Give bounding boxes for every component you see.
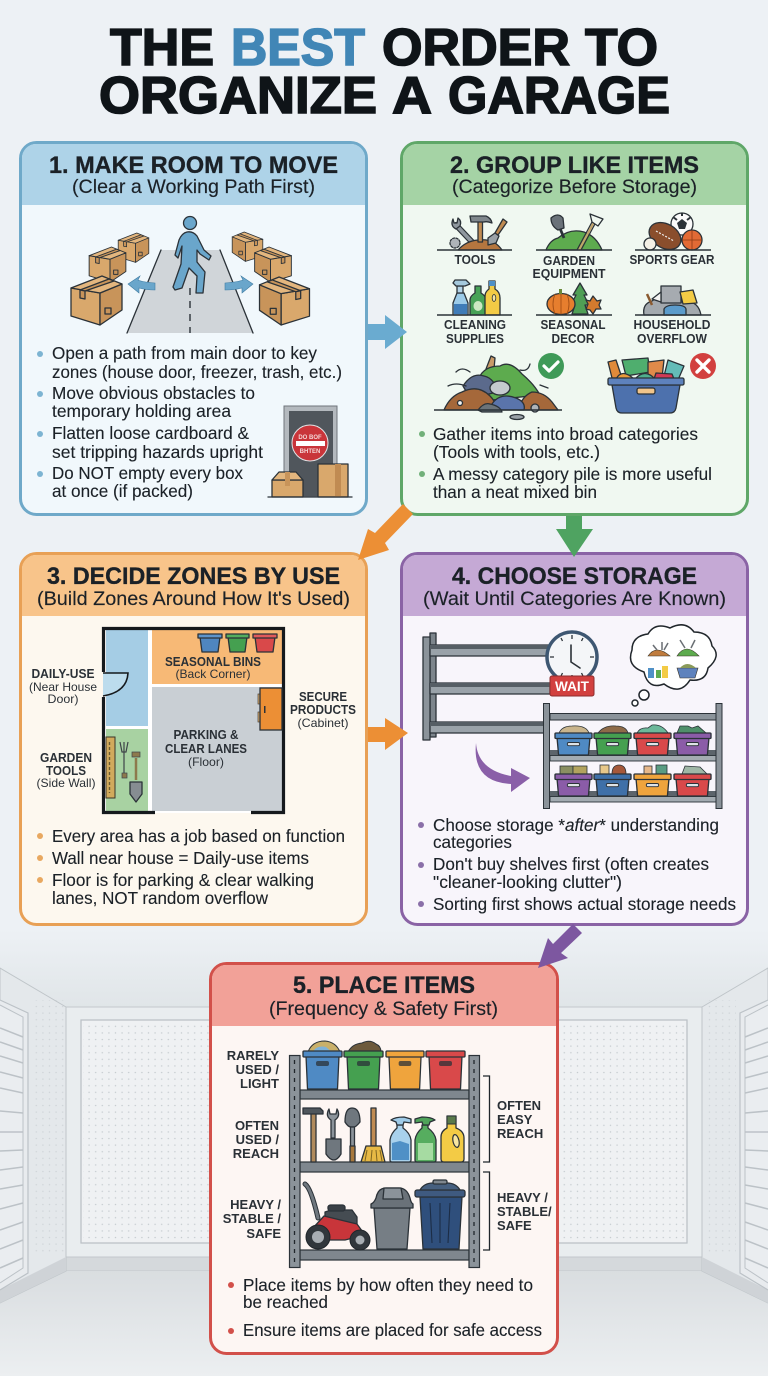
- icon: cabinet: [258, 688, 282, 730]
- bullet list: step 5: Ensure items are placed for safe access: [243, 1320, 542, 1340]
- label: daily-use: Door): [48, 692, 78, 706]
- bullet list: step 1: at once (if packed): [52, 481, 193, 501]
- labels: left shelf levels: OFTEN: [235, 1118, 279, 1133]
- heading: step 2: (Categorize Before Storage): [452, 176, 697, 198]
- bullet list: step 2: (Tools with tools, etc.): [433, 442, 600, 462]
- arrow: step 3 to step 4: [368, 718, 408, 750]
- icon: sports gear: [635, 213, 711, 255]
- bullet list: step 3: [37, 826, 345, 908]
- bullet list: step 4: Sorting first shows actual storage needs: [433, 894, 736, 914]
- bullet list: step 5: [228, 1275, 542, 1340]
- heading: step 2: 2. GROUP LIKE ITEMS: [450, 152, 699, 179]
- bullet list: step 3: Wall near house = Daily-use items: [52, 848, 309, 868]
- bullet list: step 1: Move obvious obstacles to: [52, 383, 255, 403]
- heading: step 3: 3. DECIDE ZONES BY USE: [47, 563, 340, 590]
- bullet list: step 4: [418, 815, 736, 914]
- bullet list: step 2: A messy category pile is more useful: [433, 464, 712, 484]
- bullet list: step 2: [419, 424, 712, 502]
- icon: wait sign: WAIT: [555, 678, 589, 694]
- brackets: right shelf levels: [483, 1076, 490, 1250]
- labels: inside zones: SEASONAL BINS: [165, 655, 261, 669]
- label: seasonal decor: [540, 318, 606, 346]
- panel: 4 choose storage: [402, 554, 748, 924]
- bullet list: step 1: zones (house door, freezer, trash, etc.): [52, 362, 342, 382]
- bullet list: step 3: Every area has a job based on function: [52, 826, 345, 846]
- label: garden tools: [36, 751, 96, 790]
- panel: 3 decide zones by use: [20, 554, 366, 924]
- label: garden equipment: GARDEN: [543, 254, 595, 268]
- illustration: filled shelf with bins: [544, 704, 722, 808]
- bullet list: step 1: Open a path from main door to key: [52, 343, 317, 363]
- label: secure products: [290, 690, 356, 730]
- icon: seasonal decor: [536, 283, 612, 315]
- title: GARAGE: [448, 67, 670, 125]
- labels: left shelf levels: USED /: [236, 1062, 279, 1077]
- arrow: step 2 to step 4: [556, 516, 593, 557]
- labels: right shelf levels: OFTEN: [497, 1098, 541, 1113]
- icon: cleaning supplies: [437, 280, 512, 315]
- arrow: step 1 to step 2: [368, 315, 407, 349]
- labels: left shelf levels: RARELY: [227, 1048, 279, 1063]
- bullet list: step 4: categories: [433, 832, 512, 852]
- title: TO: [585, 19, 658, 77]
- labels: right shelf levels: STABLE/: [497, 1204, 552, 1219]
- bullet list: step 2: Gather items into broad categories: [433, 424, 698, 444]
- labels: right shelf levels: REACH: [497, 1126, 543, 1141]
- heading: step 3: [37, 563, 350, 610]
- labels: inside zones: (Back Corner): [176, 667, 250, 681]
- bullet list: step 1: set tripping hazards upright: [52, 442, 263, 462]
- icon: neat mixed bin: [608, 358, 684, 413]
- heading: step 5: (Frequency & Safety First): [269, 998, 498, 1020]
- icon: messy category pile: [434, 356, 562, 420]
- label: seasonal decor: DECOR: [552, 332, 594, 346]
- label: cleaning supplies: CLEANING: [444, 318, 506, 332]
- heading: step 1: [49, 152, 338, 198]
- heading: step 2: [450, 152, 699, 198]
- icon: x mark: [690, 353, 716, 379]
- bin contents: [559, 725, 707, 774]
- bullet list: step 5: Place items by how often they need to: [243, 1275, 533, 1295]
- bullet list: step 1: [37, 343, 342, 501]
- labels: inside zones: (Floor): [188, 755, 224, 769]
- label: household overflow: [634, 318, 710, 346]
- labels: inside zones: CLEAR LANES: [165, 742, 247, 756]
- labels: left shelf levels: HEAVY /: [230, 1197, 281, 1212]
- heading: step 1: (Clear a Working Path First): [72, 176, 315, 198]
- label: garden tools: GARDEN: [40, 751, 92, 765]
- label: secure products: (Cabinet): [298, 716, 348, 730]
- arrow: purple curved: [476, 743, 530, 792]
- label: seasonal decor: SEASONAL: [540, 318, 606, 332]
- bullet list: step 3: Floor is for parking & clear walking: [52, 870, 314, 890]
- icon: clock: [547, 632, 597, 682]
- icon: do not enter door with boxes: [268, 406, 352, 497]
- title: ORDER: [382, 19, 570, 77]
- panel: 2 group like items: [402, 142, 748, 514]
- arrow: step 2 to step 3: [358, 504, 413, 560]
- label: tools: TOOLS: [454, 253, 496, 267]
- icon: seasonal bins: [198, 634, 277, 652]
- labels: inside zones: PARKING &: [174, 728, 238, 742]
- icon: garden tools rack: [106, 737, 142, 802]
- mower and trash cans on bottom shelf: [305, 1180, 465, 1250]
- labels: left shelf levels: REACH: [233, 1146, 279, 1161]
- tools and cleaners on middle shelf: [303, 1108, 464, 1162]
- bullet list: step 1: Do NOT empty every box: [52, 463, 243, 483]
- icon: wait sign: [550, 676, 594, 696]
- label: household overflow: HOUSEHOLD: [634, 318, 710, 332]
- labels: left shelf levels: SAFE: [246, 1226, 281, 1241]
- bullet list: step 4: Don't buy shelves first (often creates: [433, 854, 709, 874]
- label: garden equipment: [532, 254, 606, 281]
- panel: 5 place items: [210, 964, 558, 1354]
- labels: right shelf levels: EASY: [497, 1112, 533, 1127]
- illustration: clearing a path: [71, 216, 309, 333]
- label: household overflow: OVERFLOW: [637, 332, 707, 346]
- panel: 1 make room to move: [20, 142, 366, 514]
- label: sports gear: SPORTS GEAR: [630, 253, 714, 267]
- labels: right shelf levels: HEAVY /: [497, 1190, 548, 1205]
- title: ORGANIZE: [99, 67, 377, 125]
- label: garden tools: TOOLS: [46, 764, 86, 778]
- heading: step 1: 1. MAKE ROOM TO MOVE: [49, 152, 338, 179]
- heading: step 3: (Build Zones Around How It's Used): [37, 588, 350, 610]
- labels: inside zones: [165, 655, 261, 769]
- icon: do not enter door with boxes: DO BOF: [298, 435, 322, 441]
- label: secure products: SECURE: [299, 690, 347, 704]
- title: THE: [110, 19, 214, 77]
- label: cleaning supplies: SUPPLIES: [446, 332, 504, 346]
- icon: do not enter door with boxes: BHTEN: [300, 449, 320, 455]
- bullet list: step 1: temporary holding area: [52, 401, 231, 421]
- labels: right shelf levels: [497, 1098, 552, 1233]
- label: daily-use: DAILY-USE: [32, 667, 94, 681]
- bullet list: step 1: Flatten loose cardboard &: [52, 423, 249, 443]
- illustration: shelving unit: [290, 1041, 480, 1268]
- bullet list: step 4: "cleaner-looking clutter"): [433, 872, 622, 892]
- labels: left shelf levels: [223, 1048, 281, 1241]
- label: secure products: PRODUCTS: [290, 703, 356, 717]
- bullet list: step 5: be reached: [243, 1292, 328, 1312]
- title: [99, 19, 670, 125]
- label: garden equipment: EQUIPMENT: [532, 267, 606, 281]
- labels: left shelf levels: STABLE /: [223, 1211, 281, 1226]
- icon: thought bubble: [630, 625, 716, 706]
- title: BEST: [231, 19, 365, 77]
- heading: step 4: 4. CHOOSE STORAGE: [452, 563, 697, 590]
- label: cleaning supplies: [444, 318, 506, 346]
- bullet list: step 2: than a neat mixed bin: [433, 482, 597, 502]
- labels: left shelf levels: LIGHT: [240, 1076, 279, 1091]
- title: A: [392, 67, 432, 125]
- labels: right shelf levels: SAFE: [497, 1218, 532, 1233]
- icon: household overflow: [635, 286, 711, 315]
- icon: check mark: [538, 353, 564, 379]
- illustration: empty shelf: [423, 633, 550, 740]
- icon: tools: [437, 216, 512, 250]
- heading: step 5: 5. PLACE ITEMS: [293, 972, 475, 999]
- heading: step 4: [423, 563, 726, 610]
- bullet list: step 4: Choose storage *after* understanding: [433, 815, 719, 835]
- icon: garden equipment: [536, 214, 612, 250]
- label: daily-use: (Near House: [29, 680, 97, 694]
- label: garden tools: (Side Wall): [36, 776, 96, 790]
- floor plan: [103, 628, 284, 813]
- labels: left shelf levels: USED /: [236, 1132, 279, 1147]
- heading: step 4: (Wait Until Categories Are Known): [423, 588, 726, 610]
- arrow: step 4 to step 5: [538, 924, 582, 968]
- bins on top shelf: [303, 1041, 465, 1089]
- label: daily-use: [29, 667, 97, 706]
- heading: step 5: [269, 972, 498, 1020]
- bullet list: step 3: lanes, NOT random overflow: [52, 888, 268, 908]
